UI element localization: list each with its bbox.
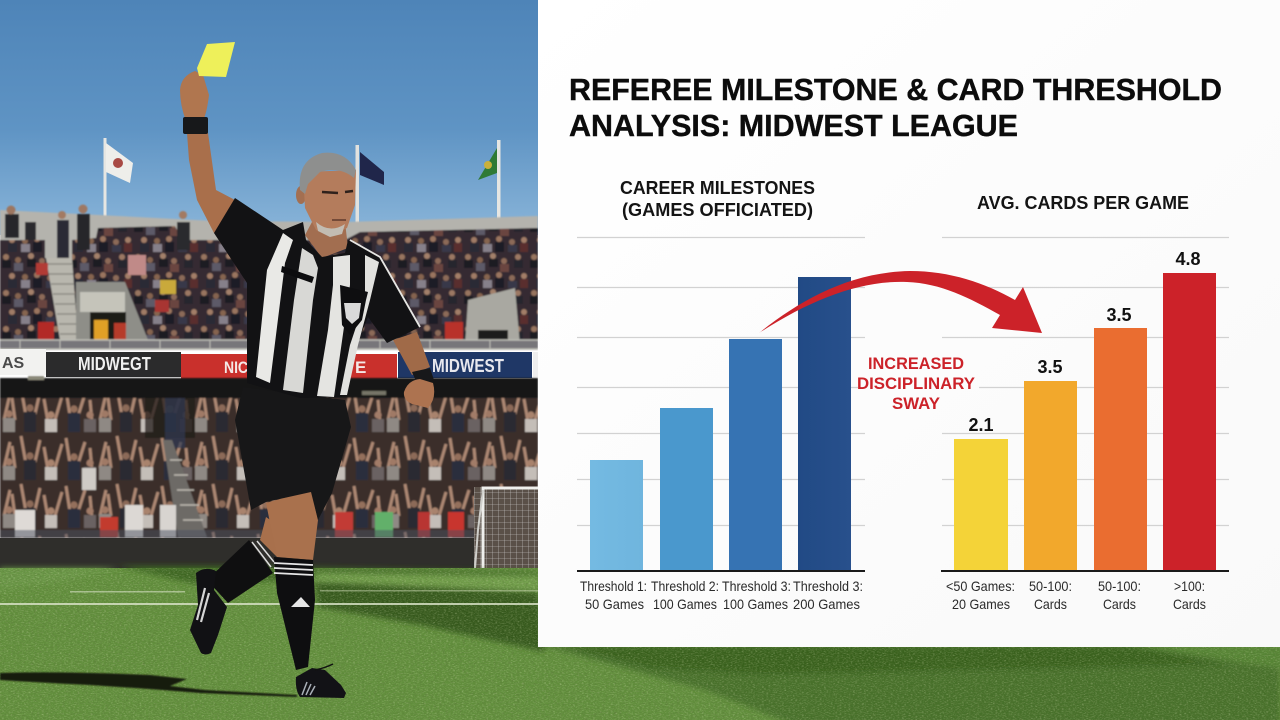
advertising banners: MIDWEST <box>432 356 504 376</box>
front sock <box>274 557 315 670</box>
advertising banners <box>0 349 538 379</box>
pitch-side wall <box>0 538 538 568</box>
axis labels: Threshold 3: <box>722 578 791 594</box>
value labels: 3.5 <box>1037 357 1063 377</box>
chart heading: career milestones: CAREER MILESTONES <box>620 178 815 198</box>
callout: increased disciplinary sway <box>857 354 976 413</box>
axis labels: Threshold 3: <box>793 578 863 594</box>
title: REFEREE MILESTONE & CARD THRESHOLD <box>569 72 1222 107</box>
axis labels: 20 Games <box>952 596 1010 612</box>
axis labels: Cards <box>1034 596 1067 612</box>
axis labels <box>946 578 1206 612</box>
yellow card <box>197 42 235 77</box>
callout: increased disciplinary sway: DISCIPLINARY <box>857 374 976 393</box>
neck <box>305 222 348 258</box>
callout: increased disciplinary sway: SWAY <box>892 394 941 413</box>
referee figure <box>180 42 434 698</box>
axis labels: Cards <box>1103 596 1136 612</box>
rear leg and boot <box>190 517 285 654</box>
black shorts <box>235 387 351 520</box>
wristwatch <box>183 117 208 134</box>
axis labels: 100 Games <box>723 596 788 612</box>
front boot <box>296 664 346 698</box>
raised arm <box>187 133 240 233</box>
advertising banners: MIDWEGT <box>78 354 151 374</box>
axis labels: 50 Games <box>585 596 644 612</box>
raised fist <box>180 71 209 121</box>
advertising banners: NIC <box>224 358 248 377</box>
bars <box>954 273 1216 571</box>
axis labels: 50-100: <box>1029 578 1072 594</box>
value labels: 2.1 <box>968 415 994 435</box>
axis labels: Threshold 2: <box>651 578 719 594</box>
axis labels: <50 Games: <box>946 578 1015 594</box>
axis labels: 200 Games <box>793 596 860 612</box>
chart heading: career milestones: (GAMES OFFICIATED) <box>622 200 813 220</box>
axis labels: Cards <box>1173 596 1206 612</box>
axis labels <box>580 578 863 612</box>
axis labels: >100: <box>1174 578 1205 594</box>
front leg <box>266 490 318 560</box>
player shadow on grass <box>0 672 297 697</box>
stadium upper stand <box>0 204 538 350</box>
chart heading: career milestones <box>620 178 815 220</box>
grass pitch <box>0 566 1280 720</box>
title: ANALYSIS: MIDWEST LEAGUE <box>569 108 1018 143</box>
photo: referee showing a yellow card in a stadium <box>0 0 538 568</box>
sky <box>0 0 538 235</box>
goal net <box>474 487 538 568</box>
title <box>569 72 1222 143</box>
lowered forearm and fist <box>393 332 434 408</box>
callout: increased disciplinary sway: INCREASED <box>868 354 964 373</box>
bars <box>590 277 851 571</box>
value labels: 3.5 <box>1106 305 1132 325</box>
head <box>296 153 356 237</box>
striped referee jersey <box>214 198 420 398</box>
stadium lower stand crowd <box>0 376 538 538</box>
panel: white chart panel <box>538 0 1280 647</box>
chart: average cards per game <box>941 193 1229 612</box>
axis labels: 100 Games <box>653 596 717 612</box>
value labels: 4.8 <box>1175 249 1201 269</box>
chart heading: average cards: AVG. CARDS PER GAME <box>977 193 1189 213</box>
chart: career milestones <box>577 178 865 612</box>
flags on poles <box>104 138 500 235</box>
advertising banners: AS <box>2 355 25 372</box>
value labels <box>968 249 1201 435</box>
axis labels: Threshold 1: <box>580 578 647 594</box>
advertising banners: E <box>355 358 366 377</box>
axis labels: 50-100: <box>1098 578 1141 594</box>
arrow: milestones to cards <box>759 271 1042 333</box>
